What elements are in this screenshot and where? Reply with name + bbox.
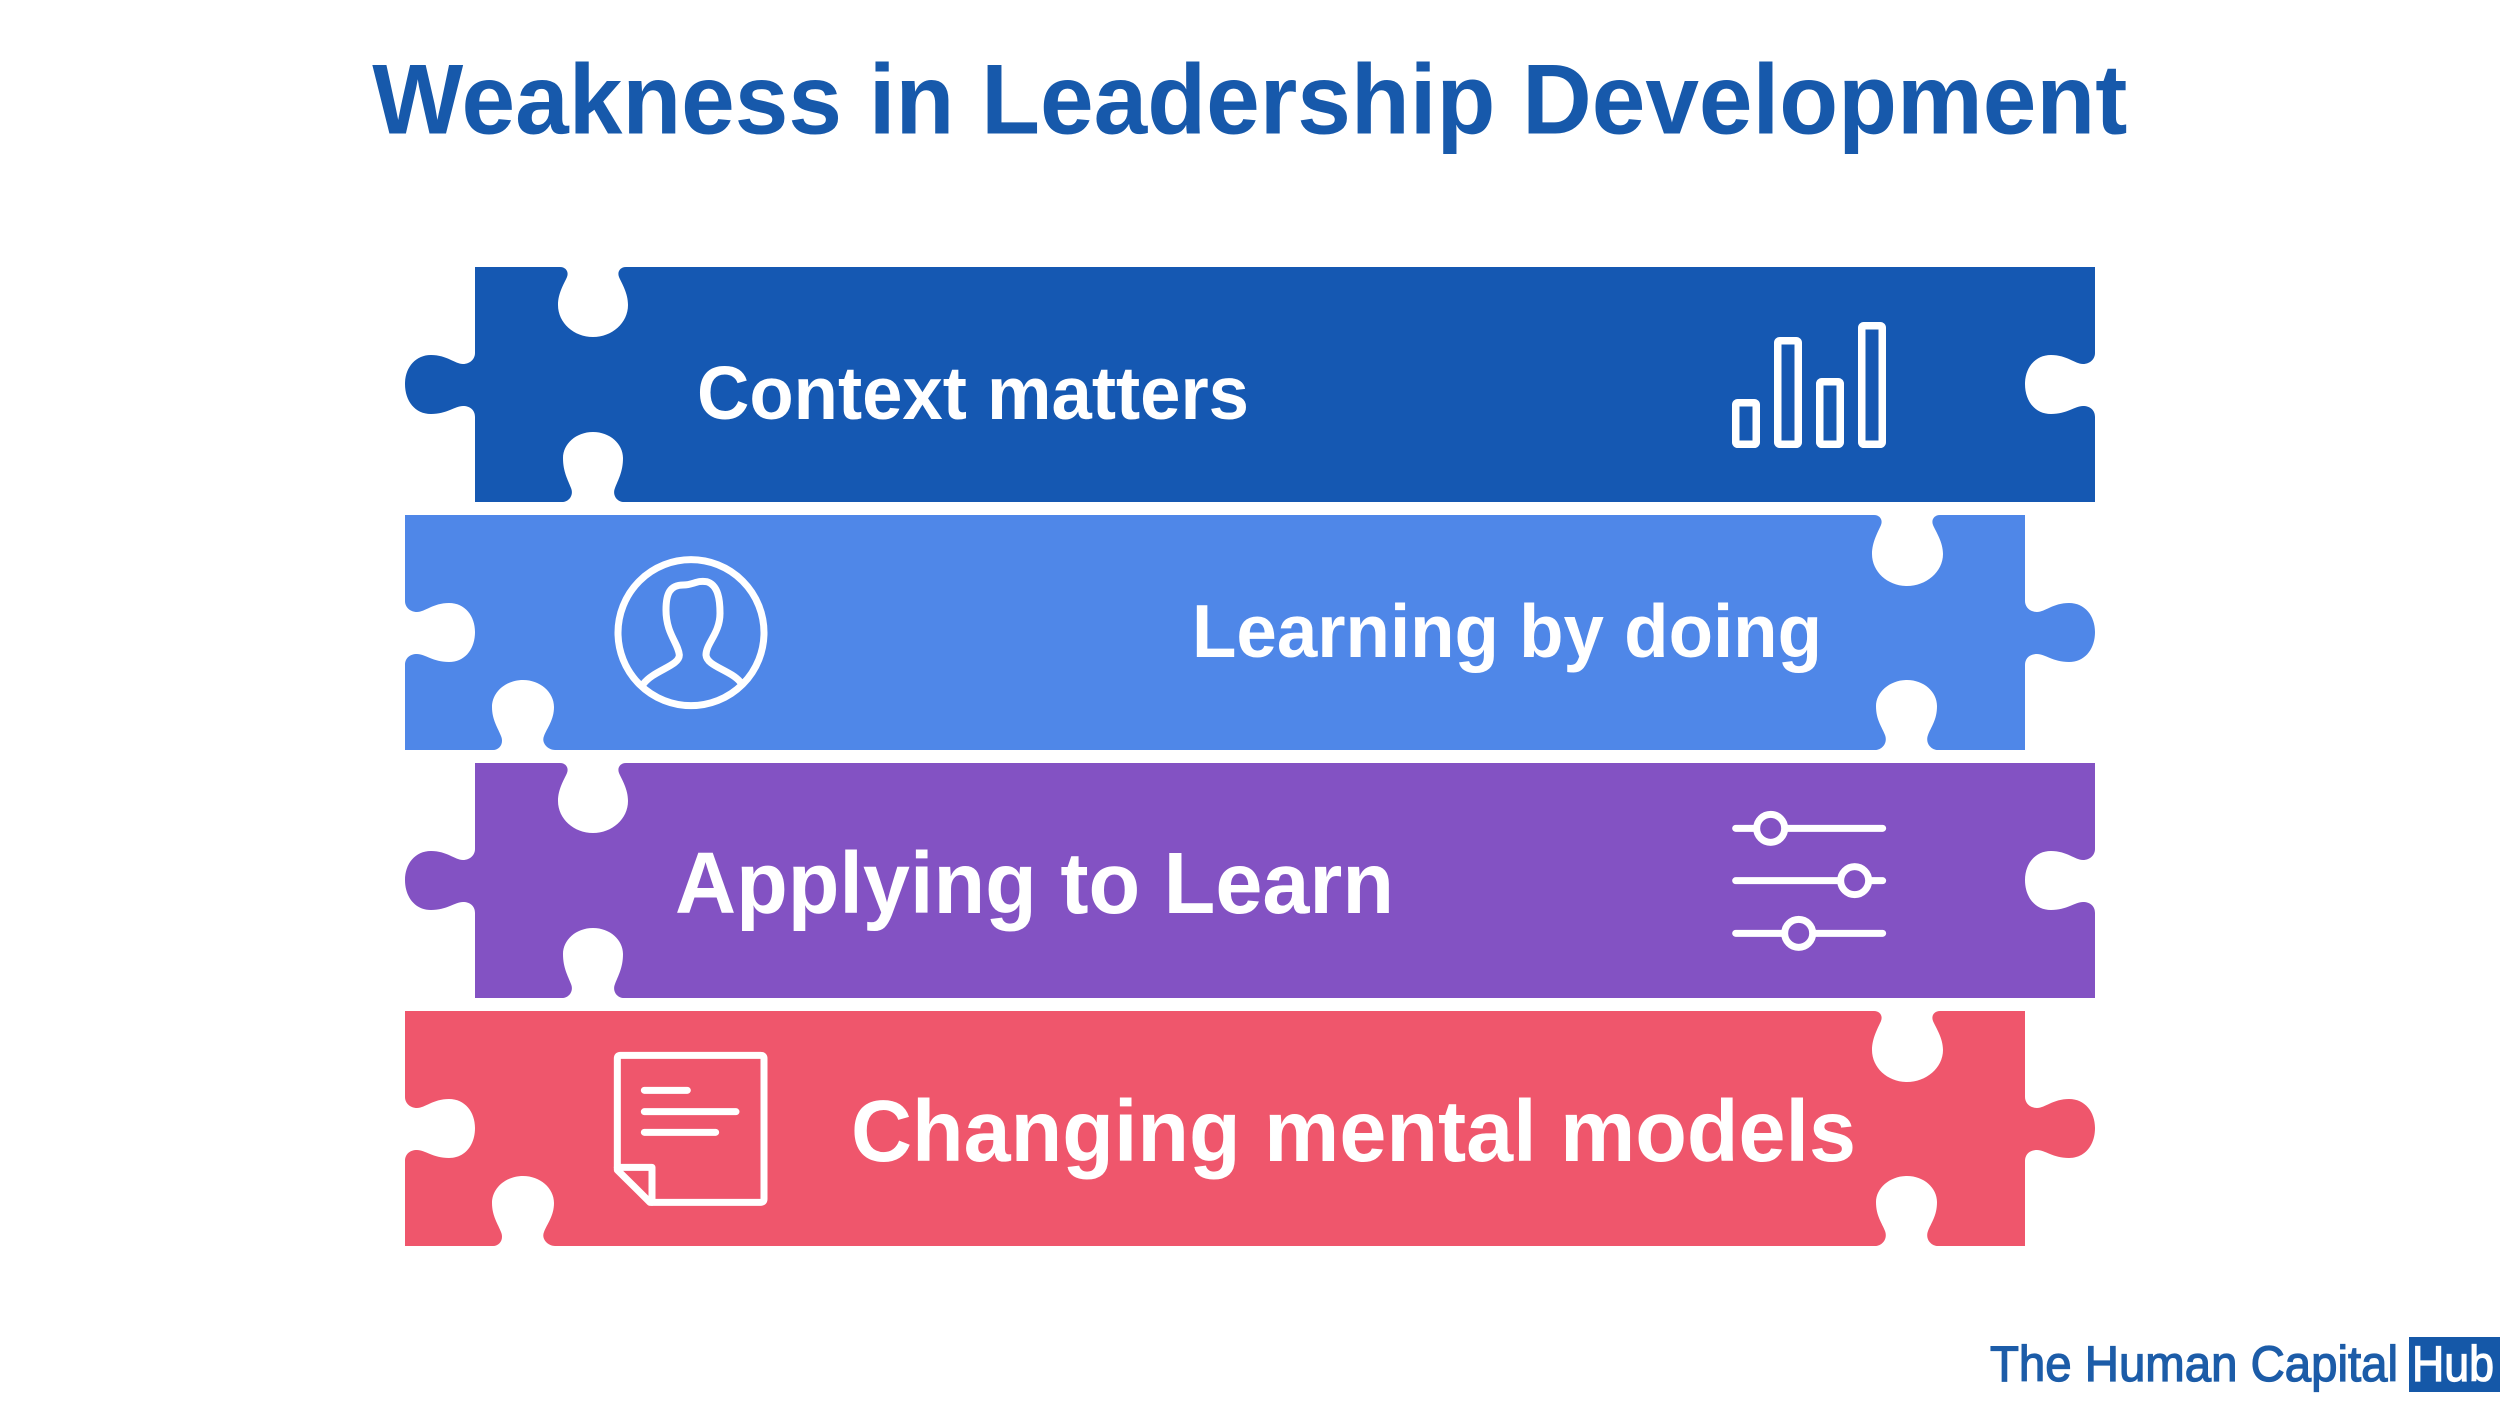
logo box [2409, 1337, 2500, 1392]
icon: document note [617, 1055, 764, 1202]
label: context matters: Context matters [697, 351, 1249, 435]
label: applying to learn: Applying to Learn [675, 834, 1394, 932]
label: changing mental models: Changing mental models [851, 1082, 1856, 1180]
icon: bar chart [1736, 326, 1882, 444]
panel: learning by doing [405, 515, 2095, 750]
puzzle piece: dark blue [405, 267, 2095, 502]
panel: applying to learn [405, 763, 2095, 998]
title: Weakness in Leadership Development [372, 44, 2127, 154]
icon: person in circle [618, 560, 764, 706]
label: learning by doing: Learning by doing [1192, 589, 1822, 673]
logo: The Human Capital Hub [1990, 1335, 2500, 1392]
puzzle piece: purple [405, 763, 2095, 998]
logo text: The Human Capital [1990, 1335, 2398, 1392]
panel: changing mental models [405, 1011, 2095, 1246]
puzzle piece: coral red [405, 1011, 2095, 1246]
panel: context matters [405, 267, 2095, 502]
puzzle piece: mid blue [405, 515, 2095, 750]
icon: sliders [1736, 814, 1883, 947]
